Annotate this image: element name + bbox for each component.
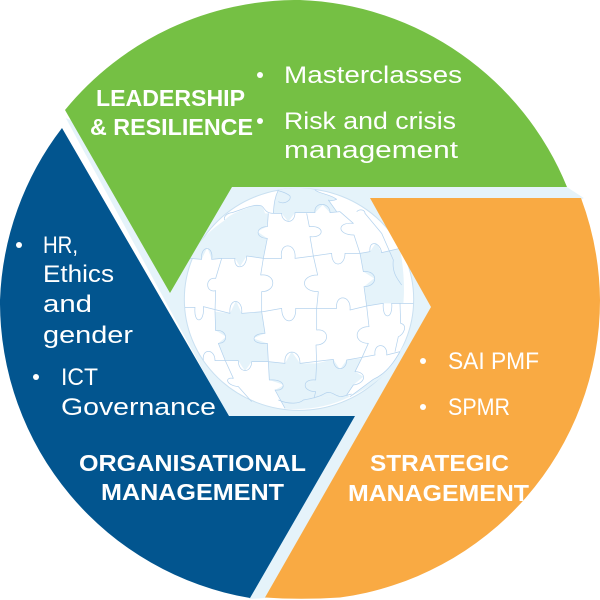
list: strategic items: SAI PMF (448, 348, 539, 375)
list: leadership items: Risk and crisis (284, 108, 456, 135)
heading: organisational management: ORGANISATIONAL (79, 450, 306, 476)
heading: leadership and resilience (90, 85, 253, 140)
heading: leadership and resilience: & RESILIENCE (90, 114, 253, 140)
list: organisational items: gender (43, 322, 133, 349)
heading: organisational management (79, 450, 306, 505)
list: organisational items: and (43, 291, 92, 318)
list: strategic items: SPMR (448, 394, 510, 421)
panel: organisational management (0, 128, 355, 598)
list: organisational items: HR, (43, 232, 78, 259)
list: organisational items: Ethics (43, 261, 114, 288)
list: strategic items (420, 348, 539, 421)
icon: jigsaw globe (184, 188, 414, 410)
list: organisational items: Governance (61, 394, 216, 421)
heading: organisational management: MANAGEMENT (101, 479, 284, 505)
heading: strategic management: STRATEGIC (370, 450, 509, 476)
panel: strategic management (265, 198, 600, 599)
heading: strategic management: MANAGEMENT (348, 480, 529, 506)
panel: leadership and resilience (65, 0, 567, 293)
heading: strategic management (348, 450, 529, 506)
list: leadership items: Masterclasses (284, 62, 462, 89)
list: organisational items: ICT (61, 364, 98, 391)
pale blue background gaps (68, 120, 582, 598)
list: leadership items: management (284, 137, 458, 164)
list: leadership items (257, 62, 462, 164)
list: organisational items (16, 232, 216, 421)
heading: leadership and resilience: LEADERSHIP (96, 85, 245, 111)
